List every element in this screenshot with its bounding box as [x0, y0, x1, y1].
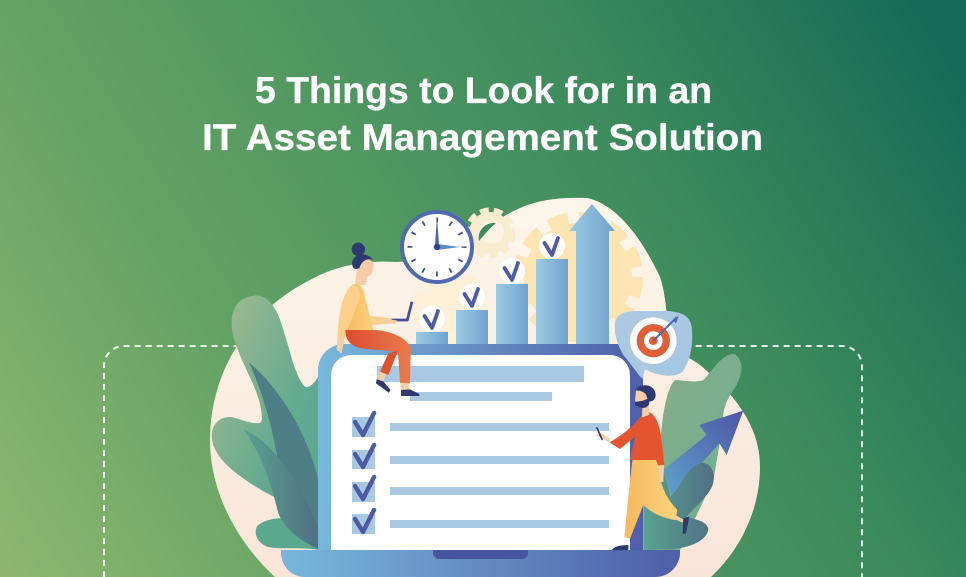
hand on laptop: [383, 318, 397, 324]
up arrow: [569, 204, 615, 344]
leaf: dark tall: [249, 363, 318, 528]
arm: [337, 285, 360, 353]
laptop: [281, 344, 680, 577]
hair: [352, 254, 373, 269]
right plant: [643, 354, 743, 550]
face and neck: [355, 259, 373, 285]
woman sitting with laptop: [337, 243, 419, 396]
back arm: [362, 315, 392, 326]
title: 5 Things to Look for in an: [255, 70, 712, 111]
leaf: dark short: [243, 429, 318, 549]
laptop notch: [433, 550, 528, 559]
bar 4: [536, 259, 568, 344]
target: [630, 317, 677, 364]
gear: small: [467, 210, 513, 256]
checklist row 4: [352, 510, 609, 534]
beard: [635, 398, 649, 408]
bar 2: [456, 310, 488, 344]
ankles: [377, 370, 409, 390]
feet: [376, 379, 391, 393]
front foot and shoe: [675, 515, 684, 523]
back shoe: [612, 545, 628, 550]
leaves: light: [212, 296, 318, 550]
laptop: [388, 302, 412, 320]
dashed content frame: [104, 346, 862, 577]
back calf: [380, 350, 398, 375]
phone: [597, 427, 602, 440]
bar 3: [496, 284, 528, 344]
laptop frame: [318, 344, 643, 550]
wrist: [658, 465, 664, 483]
torso: [345, 284, 373, 330]
arrow: blue growth arrow: [663, 411, 743, 497]
face and neck: [635, 391, 649, 417]
checklist: [352, 413, 609, 534]
hand: [595, 433, 610, 442]
checklist row 3: [352, 477, 609, 502]
laptop screen: [331, 355, 630, 550]
cream backdrop blob: [210, 198, 760, 577]
hand: [337, 337, 344, 354]
checklist row 2: [352, 445, 609, 469]
bubble: [615, 311, 692, 379]
dart: [653, 317, 677, 341]
man with phone: [595, 385, 689, 550]
gear: medium: [416, 273, 484, 341]
hair: [636, 385, 656, 402]
leaf: lower: [256, 518, 318, 550]
leaf: teal: [643, 463, 714, 550]
gears: [416, 210, 637, 341]
trousers: [345, 330, 411, 383]
hair bun: [352, 243, 365, 256]
title: IT Asset Management Solution: [202, 117, 763, 158]
left plant: [212, 296, 318, 550]
title: [202, 70, 763, 158]
bar chart: [416, 204, 615, 344]
shirt and arm: [609, 412, 664, 466]
trousers: [624, 458, 677, 539]
checklist row 1: [352, 413, 609, 437]
laptop base: [281, 550, 680, 577]
target speech bubble: [615, 311, 692, 379]
bar 1: [416, 332, 448, 344]
leaf: light: [643, 354, 741, 550]
clock: [402, 212, 472, 282]
screen text bars: [377, 366, 584, 401]
bar badges: [419, 233, 565, 332]
gear: large: [519, 218, 637, 336]
